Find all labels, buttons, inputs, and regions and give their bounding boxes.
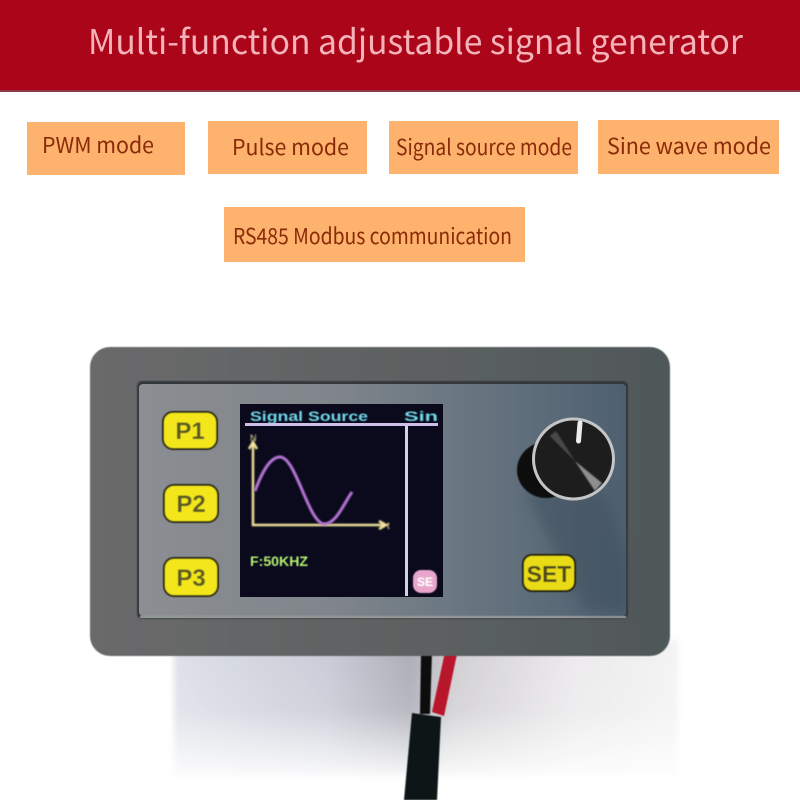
black wire <box>420 652 432 714</box>
header banner <box>0 0 800 92</box>
screen divider lines <box>245 423 438 596</box>
frequency readout: F:50KHZ <box>250 553 308 569</box>
button: P1 <box>163 412 217 449</box>
mode label: PWM mode <box>27 122 185 175</box>
mode label: PWM mode: PWM mode <box>42 128 154 160</box>
mode label: RS485 Modbus communication <box>224 207 525 262</box>
button: SET <box>523 555 575 591</box>
mode label: Pulse mode: Pulse mode <box>232 130 349 162</box>
mode label: Sine wave mode <box>598 120 779 174</box>
device body <box>90 347 670 656</box>
knob face <box>534 419 614 499</box>
device surface shadow <box>170 640 682 780</box>
knob shadow <box>525 490 627 612</box>
sine wave <box>255 457 352 524</box>
mode label: Signal source mode: Signal source mode <box>396 130 572 162</box>
cable sheath <box>404 713 441 800</box>
cable <box>404 652 457 800</box>
mode label: RS485 Modbus communication: RS485 Modbus communication <box>233 219 512 251</box>
button: SET: SET <box>527 561 571 587</box>
button: P3 <box>164 558 218 596</box>
knob highlight <box>575 461 602 491</box>
button: P1: P1 <box>175 418 205 445</box>
chart axes <box>249 433 390 532</box>
knob pointer <box>578 423 580 441</box>
mode label: Signal source mode <box>389 121 578 174</box>
chart axes: N <box>250 433 256 443</box>
chart axes: t <box>387 521 390 532</box>
status badge: SE <box>417 575 433 589</box>
title: Multi-function adjustable signal generator <box>88 15 744 64</box>
rotary knob <box>517 419 614 499</box>
front panel <box>137 381 628 619</box>
screen mode: Sin <box>404 408 438 424</box>
LCD screen <box>240 404 443 597</box>
button: P2 <box>164 485 218 522</box>
status badge <box>413 570 437 593</box>
mode label: Sine wave mode: Sine wave mode <box>607 129 771 161</box>
screen heading: Signal Source <box>250 408 368 424</box>
button: P2: P2 <box>176 491 206 518</box>
red wire <box>432 652 457 716</box>
mode label: Pulse mode <box>208 121 367 174</box>
button: P3: P3 <box>176 565 206 592</box>
knob body <box>517 442 575 498</box>
